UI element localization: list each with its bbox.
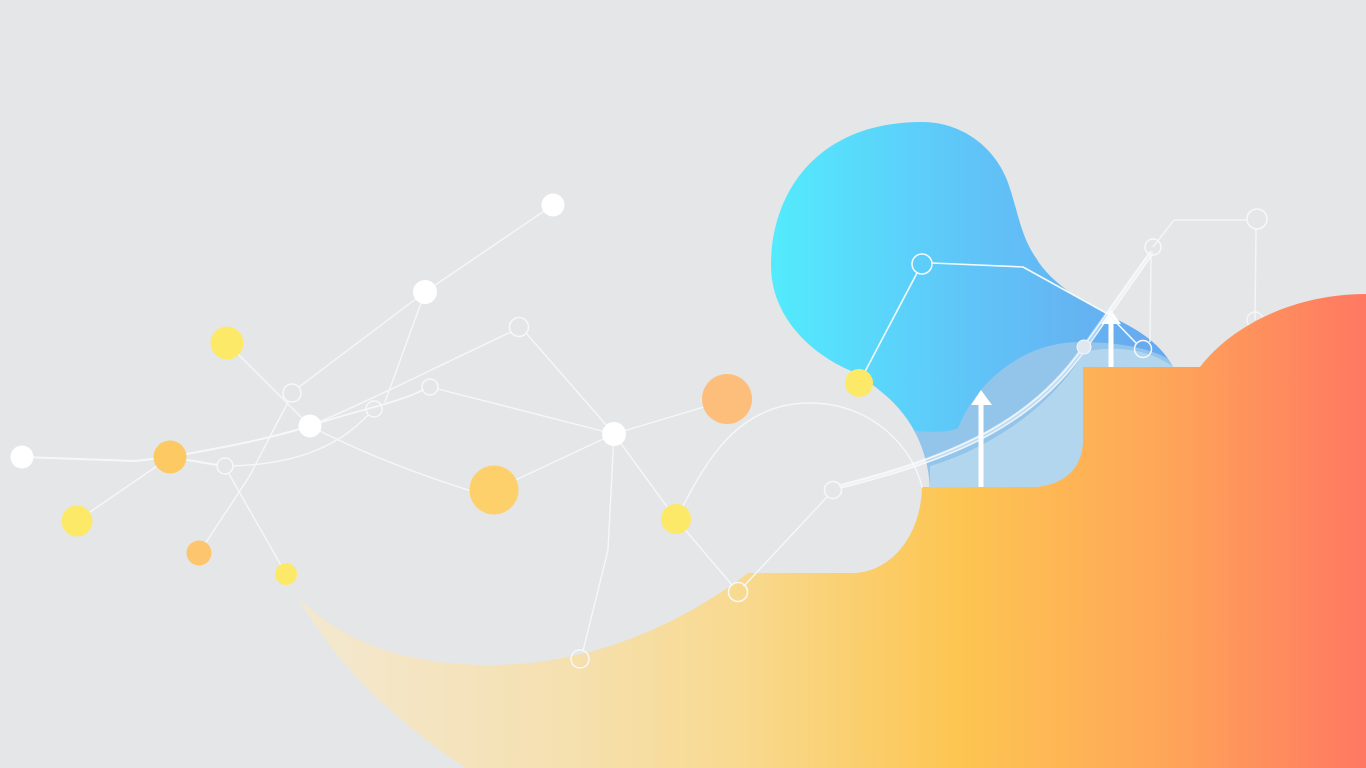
rising trend curve — [841, 252, 1152, 488]
upper right connector lines behind the orange hill — [1150, 220, 1263, 342]
yellow nodes — [62, 326, 873, 585]
hollow nodes — [217, 209, 1267, 668]
solid white nodes — [10, 194, 626, 468]
orange nodes — [154, 374, 752, 566]
growth arrow: tall — [1101, 310, 1121, 368]
translucent node on trend curve — [1077, 340, 1091, 354]
growth arrow: short — [971, 390, 992, 488]
blue blob connector lines — [859, 263, 1137, 383]
orange stepped hill — [298, 294, 1366, 768]
blue blob — [771, 122, 1180, 500]
network connector lines — [22, 205, 922, 651]
